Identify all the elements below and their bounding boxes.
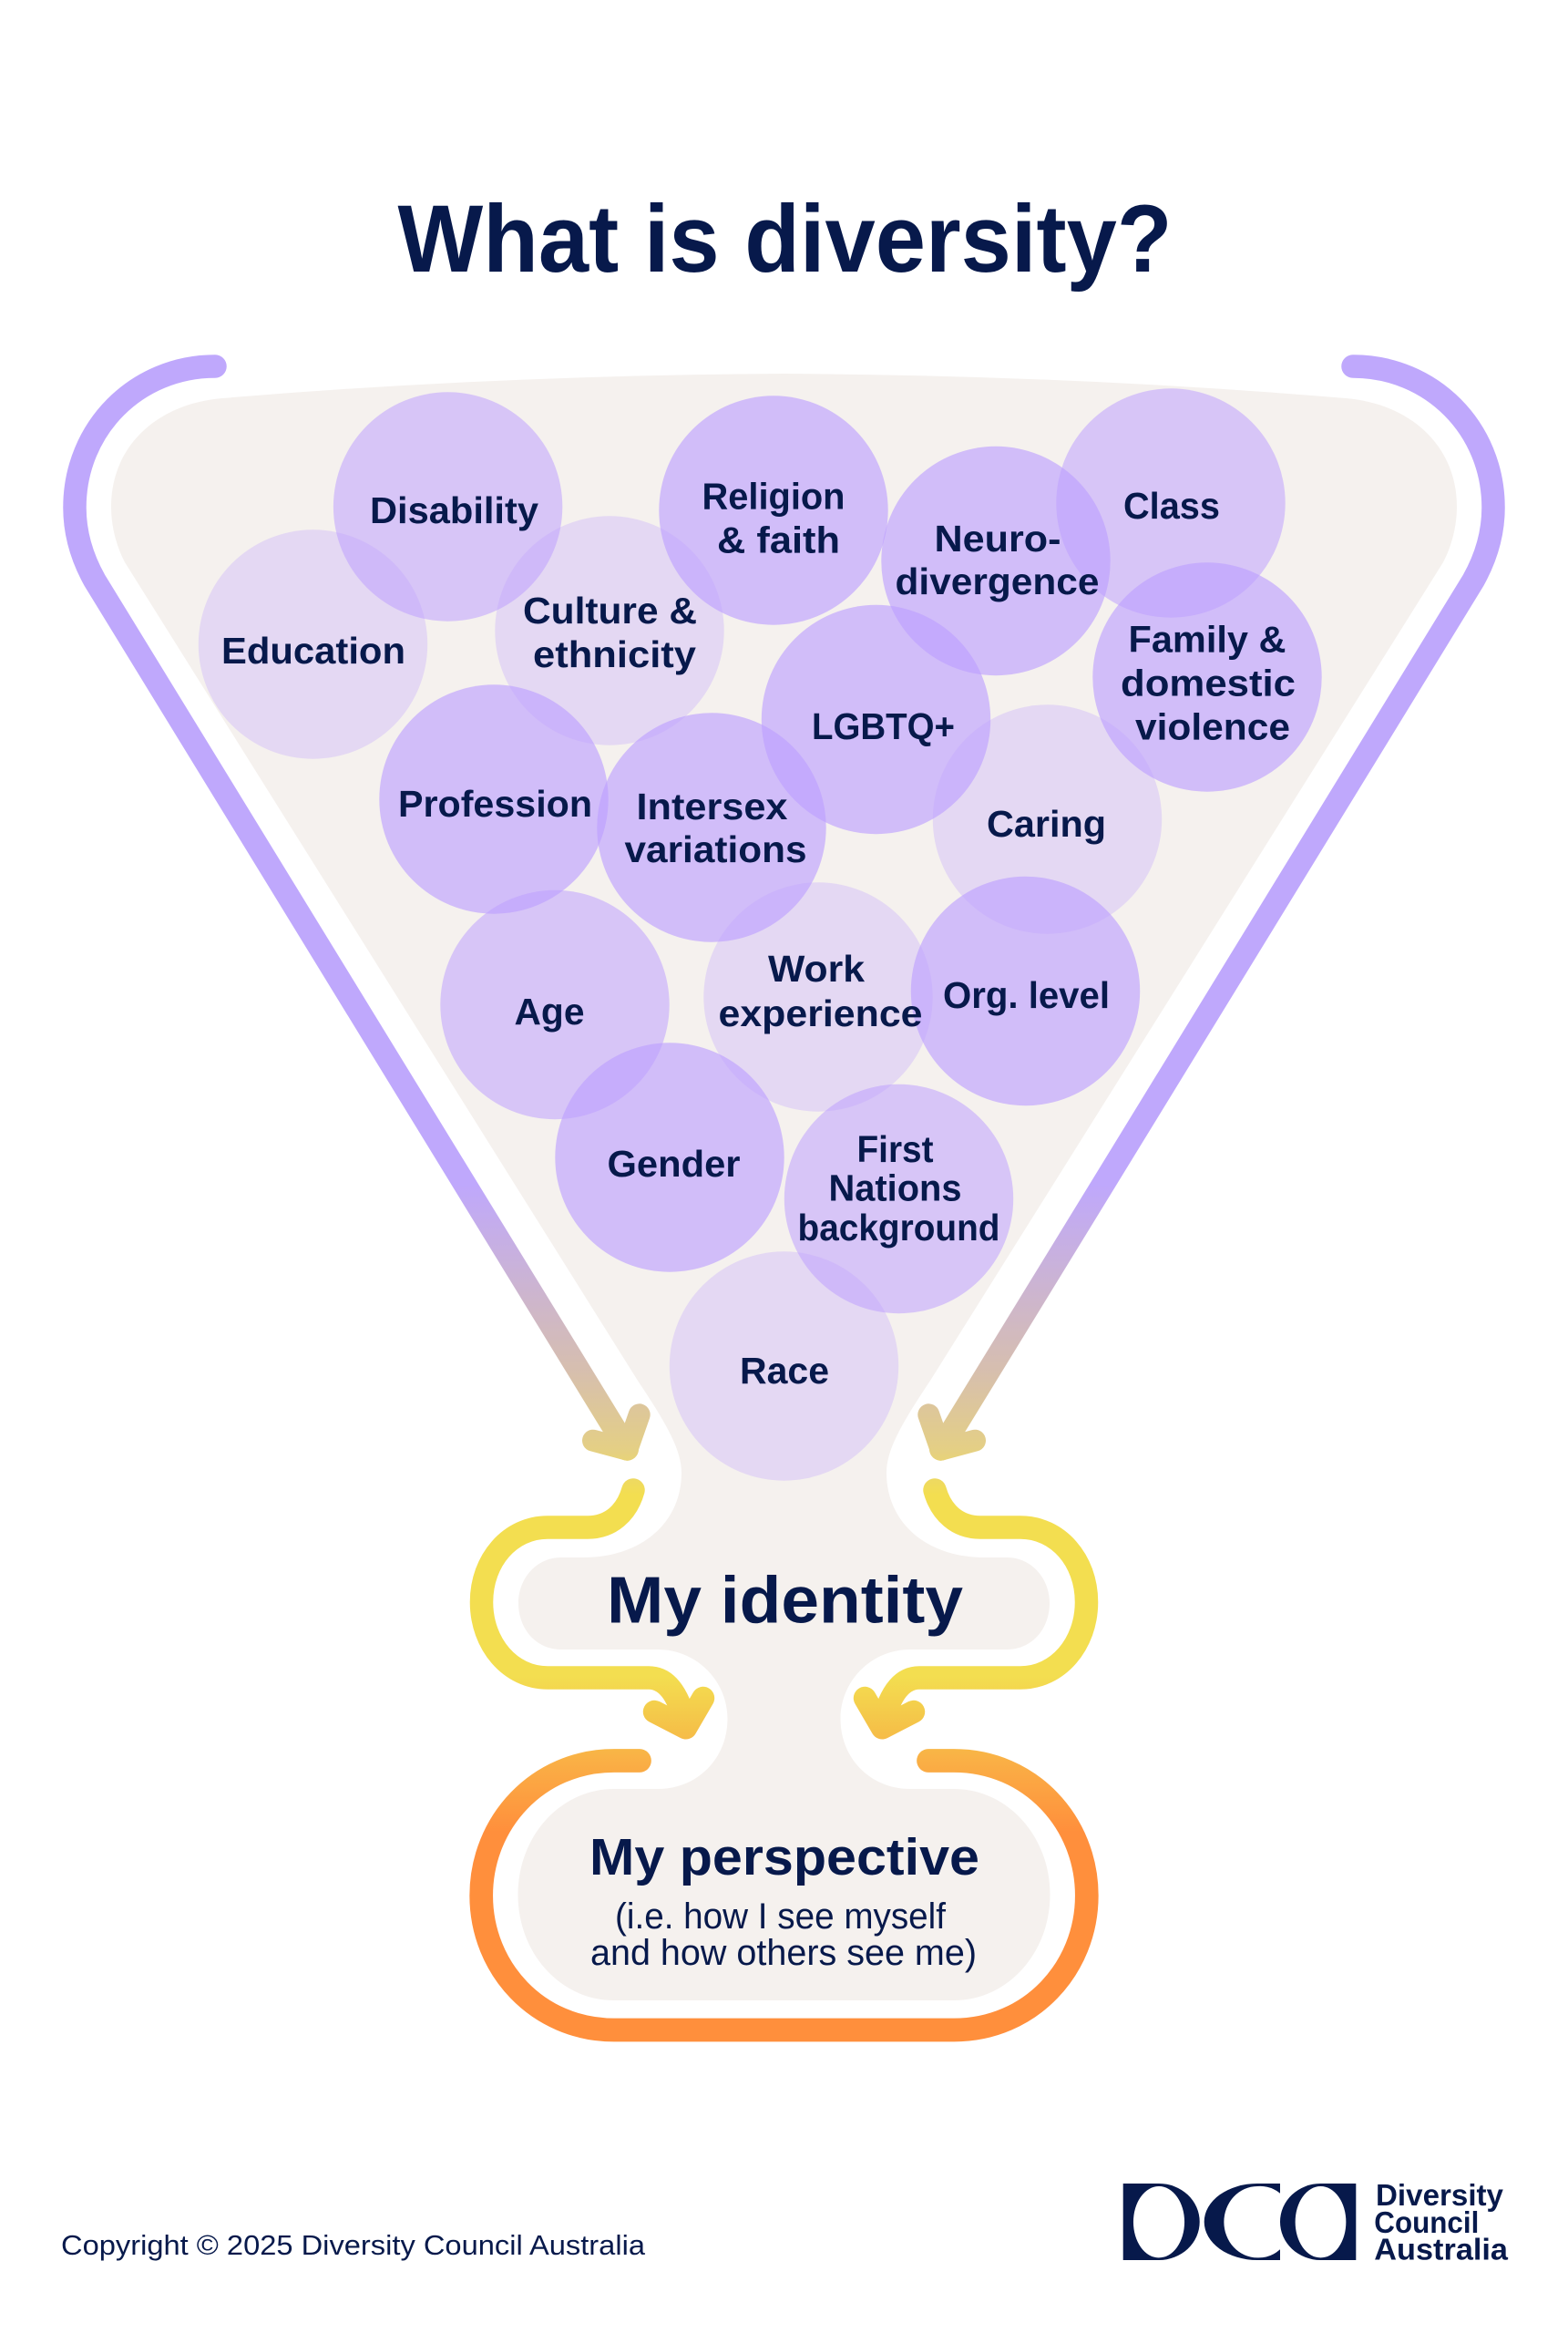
circle: profession	[379, 684, 609, 914]
circle: gender	[555, 1043, 784, 1272]
circle: org. level	[911, 877, 1140, 1105]
label: LGBTQ+: LGBTQ+	[812, 705, 955, 747]
label: Gender: Gender	[607, 1143, 741, 1185]
overlapping diversity circles	[199, 388, 1322, 1481]
label: Family & domestic violence: Family &	[1128, 618, 1286, 660]
funnel background shape	[111, 374, 1457, 2000]
circle: class	[1056, 388, 1286, 618]
label: Neurodivergence: Neuro-	[935, 518, 1061, 560]
label: First Nations background: First	[856, 1128, 934, 1170]
label: Religion & faith: & faith	[717, 519, 840, 561]
circle: race	[670, 1251, 898, 1481]
label: Culture & ethnicity	[523, 590, 697, 675]
label: Family & domestic violence	[1121, 618, 1296, 747]
label: Race: Race	[740, 1350, 829, 1392]
label: Intersex variations: variations	[625, 828, 807, 870]
label: Age: Age	[514, 991, 585, 1033]
logo wordmark	[1374, 2178, 1509, 2266]
circle: first nations background	[784, 1084, 1013, 1313]
circle: religion and faith	[659, 396, 888, 625]
label: Culture & ethnicity: ethnicity	[533, 633, 696, 675]
circle: work experience	[703, 882, 933, 1112]
label: Family & domestic violence: domestic	[1121, 662, 1296, 704]
label: Intersex variations	[625, 786, 807, 870]
label: Education: Education	[221, 630, 405, 672]
label: Class: Class	[1123, 485, 1220, 527]
arrow: left purple funnel arrow	[75, 366, 640, 1450]
panel: My perspective	[589, 1828, 979, 1973]
label: Culture & ethnicity: Culture &	[523, 590, 697, 632]
label: Work experience: experience	[718, 992, 922, 1034]
title: What is diversity?	[397, 186, 1172, 293]
label: Disability: Disability	[370, 489, 538, 531]
label: Profession: Profession	[398, 783, 592, 825]
logo wordmark: Council	[1374, 2205, 1479, 2239]
label: Work experience	[718, 948, 922, 1034]
circle: education	[199, 529, 427, 759]
label: First Nations background: background	[798, 1207, 1000, 1249]
circle: disability	[333, 392, 562, 622]
label: First Nations background: Nations	[829, 1166, 962, 1208]
subtext: definition of perspective: (i.e. how I see myself	[615, 1896, 947, 1937]
logo wordmark: Diversity	[1376, 2178, 1504, 2212]
subtext: definition of perspective: and how others see me)	[590, 1933, 977, 1973]
arrow: right purple funnel arrow	[928, 366, 1493, 1450]
logo: Diversity Council Australia	[1123, 2178, 1509, 2266]
arrow: right yellow identity arrow	[865, 1490, 1086, 1728]
orange perspective outline	[481, 1761, 1087, 2030]
circle: neurodivergence	[881, 447, 1111, 675]
logo wordmark: Australia	[1374, 2232, 1509, 2266]
label: Family & domestic violence: violence	[1135, 705, 1290, 747]
circle labels	[221, 476, 1296, 1392]
label: Religion & faith: Religion	[702, 476, 845, 518]
label: Neurodivergence: divergence	[895, 560, 1099, 602]
circle: culture and ethnicity	[495, 516, 724, 745]
label: Intersex variations: Intersex	[636, 786, 788, 827]
heading: My identity: My identity	[607, 1564, 963, 1637]
circle: family and domestic violence	[1092, 562, 1322, 792]
label: Org. level: Org. level	[943, 974, 1110, 1016]
circle: intersex variations	[597, 713, 826, 942]
circle: age	[440, 890, 670, 1119]
copyright notice: Copyright © 2025 Diversity Council Australia	[61, 2229, 646, 2261]
circle: caring	[933, 704, 1162, 934]
label: Work experience: Work	[768, 948, 865, 990]
circle: LGBTQ+	[762, 605, 990, 834]
subtext: definition of perspective	[590, 1896, 977, 1973]
heading: My perspective: My perspective	[589, 1828, 979, 1886]
logo mark: DCA monogram	[1123, 2184, 1356, 2260]
label: Neurodivergence	[895, 518, 1099, 602]
arrow: left yellow identity arrow	[481, 1490, 703, 1728]
label: Religion & faith	[702, 476, 845, 561]
label: First Nations background	[798, 1128, 1000, 1249]
label: Caring: Caring	[987, 803, 1106, 845]
